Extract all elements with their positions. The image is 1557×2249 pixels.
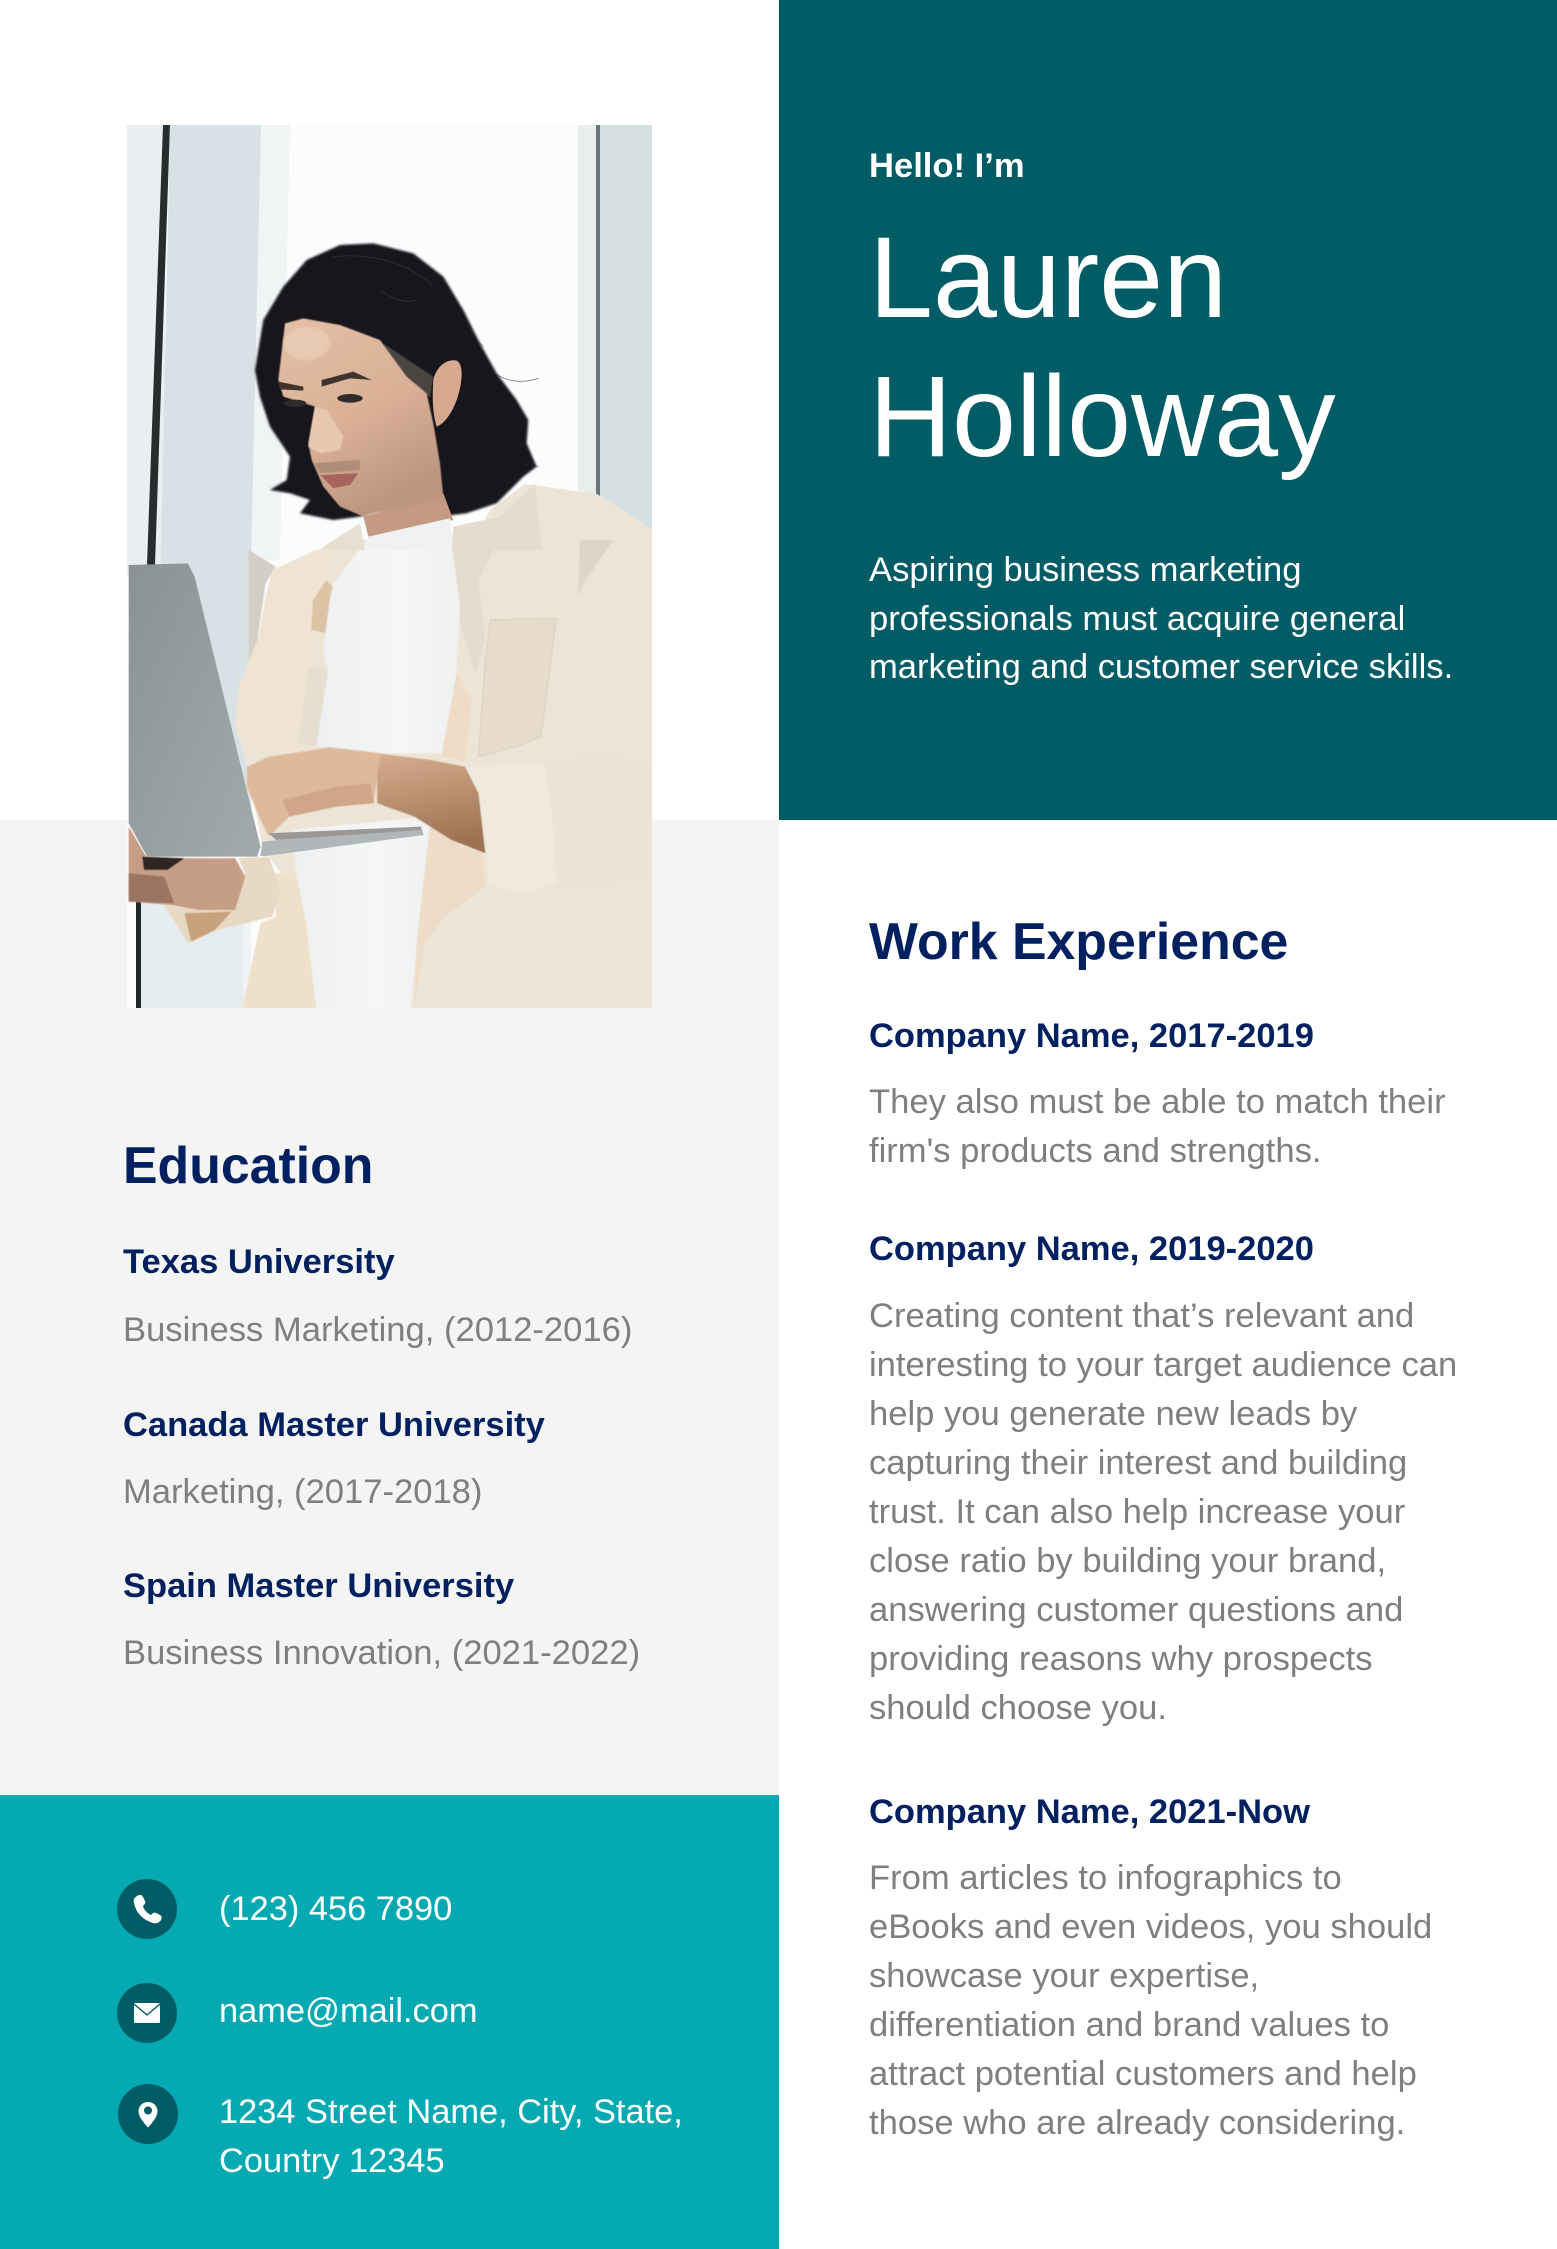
intro text: Aspiring business marketing bbox=[869, 551, 1301, 589]
greeting: Hello! I’m bbox=[869, 147, 1025, 185]
education item: Canada Master University bbox=[123, 1406, 545, 1511]
education item: Spain Master University: Spain Master University bbox=[123, 1567, 514, 1605]
contact: address: 1234 Street Name, City, State, bbox=[219, 2093, 683, 2131]
head: dark hair and face bbox=[255, 243, 542, 550]
contact: email bbox=[117, 1983, 478, 2043]
job 2021-Now bbox=[869, 1793, 1432, 2142]
name heading bbox=[869, 214, 1336, 481]
job 2021-Now: differentiation and brand values to bbox=[869, 2006, 1389, 2044]
panel: education background bbox=[0, 820, 779, 1795]
job 2017-2019: Company Name, 2017-2019 bbox=[869, 1017, 1314, 1055]
job 2019-2020: Company Name, 2019-2020 bbox=[869, 1230, 1314, 1268]
education item: Canada Master University: Canada Master University bbox=[123, 1406, 545, 1444]
work experience heading: Work Experience bbox=[869, 912, 1288, 970]
name heading: Holloway bbox=[869, 353, 1336, 481]
education heading: Education bbox=[123, 1136, 373, 1194]
job 2019-2020: providing reasons why prospects bbox=[869, 1640, 1373, 1678]
job 2019-2020: Creating content that’s relevant and bbox=[869, 1297, 1414, 1335]
education item: Canada Master University: Marketing, (2017-2018) bbox=[123, 1473, 482, 1511]
job 2019-2020: capturing their interest and building bbox=[869, 1444, 1407, 1482]
education item: Spain Master University bbox=[123, 1567, 640, 1672]
name heading: Lauren bbox=[869, 214, 1227, 342]
education item: Spain Master University: Business Innovation, (2021-2022) bbox=[123, 1634, 640, 1672]
intro text bbox=[869, 551, 1453, 686]
intro text: professionals must acquire general bbox=[869, 600, 1405, 638]
job 2021-Now: attract potential customers and help bbox=[869, 2055, 1417, 2093]
section: work experience bbox=[869, 912, 1457, 2142]
job 2019-2020: help you generate new leads by bbox=[869, 1395, 1358, 1433]
lower body: shirt, arms and laptop bbox=[129, 540, 657, 1010]
job 2021-Now: From articles to infographics to bbox=[869, 1859, 1342, 1897]
section: education bbox=[123, 1136, 640, 1672]
hair bbox=[255, 243, 538, 520]
job 2017-2019: They also must be able to match their bbox=[869, 1083, 1446, 1121]
job 2019-2020: trust. It can also help increase your bbox=[869, 1493, 1405, 1531]
contact: phone bbox=[117, 1879, 452, 1939]
job 2019-2020: should choose you. bbox=[869, 1689, 1167, 1727]
job 2017-2019: firm's products and strengths. bbox=[869, 1132, 1321, 1170]
contact: email: name@mail.com bbox=[219, 1992, 478, 2030]
intro text: marketing and customer service skills. bbox=[869, 648, 1453, 686]
face bbox=[278, 318, 462, 517]
panel: header bbox=[779, 0, 1557, 820]
education item: Texas University: Texas University bbox=[123, 1243, 395, 1281]
contact: address bbox=[118, 2084, 683, 2180]
panel: contact bbox=[0, 1795, 779, 2249]
job 2021-Now: eBooks and even videos, you should bbox=[869, 1908, 1432, 1946]
job 2021-Now: those who are already considering. bbox=[869, 2104, 1405, 2142]
contact: address: Country 12345 bbox=[219, 2142, 445, 2180]
job 2017-2019 bbox=[869, 1017, 1446, 1170]
job 2021-Now: showcase your expertise, bbox=[869, 1957, 1259, 1995]
education item: Texas University bbox=[123, 1243, 632, 1349]
job 2019-2020: answering customer questions and bbox=[869, 1591, 1403, 1629]
photo: man with long dark hair using a laptop bbox=[127, 125, 657, 1010]
collar and t-shirt neckline bbox=[320, 483, 542, 550]
job 2021-Now: Company Name, 2021-Now bbox=[869, 1793, 1310, 1831]
job 2019-2020 bbox=[869, 1230, 1457, 1727]
job 2019-2020: interesting to your target audience can bbox=[869, 1346, 1457, 1384]
neck bbox=[363, 493, 453, 537]
education item: Texas University: Business Marketing, (2012-2016) bbox=[123, 1311, 632, 1349]
contact: phone: (123) 456 7890 bbox=[219, 1890, 452, 1928]
job 2019-2020: close ratio by building your brand, bbox=[869, 1542, 1386, 1580]
